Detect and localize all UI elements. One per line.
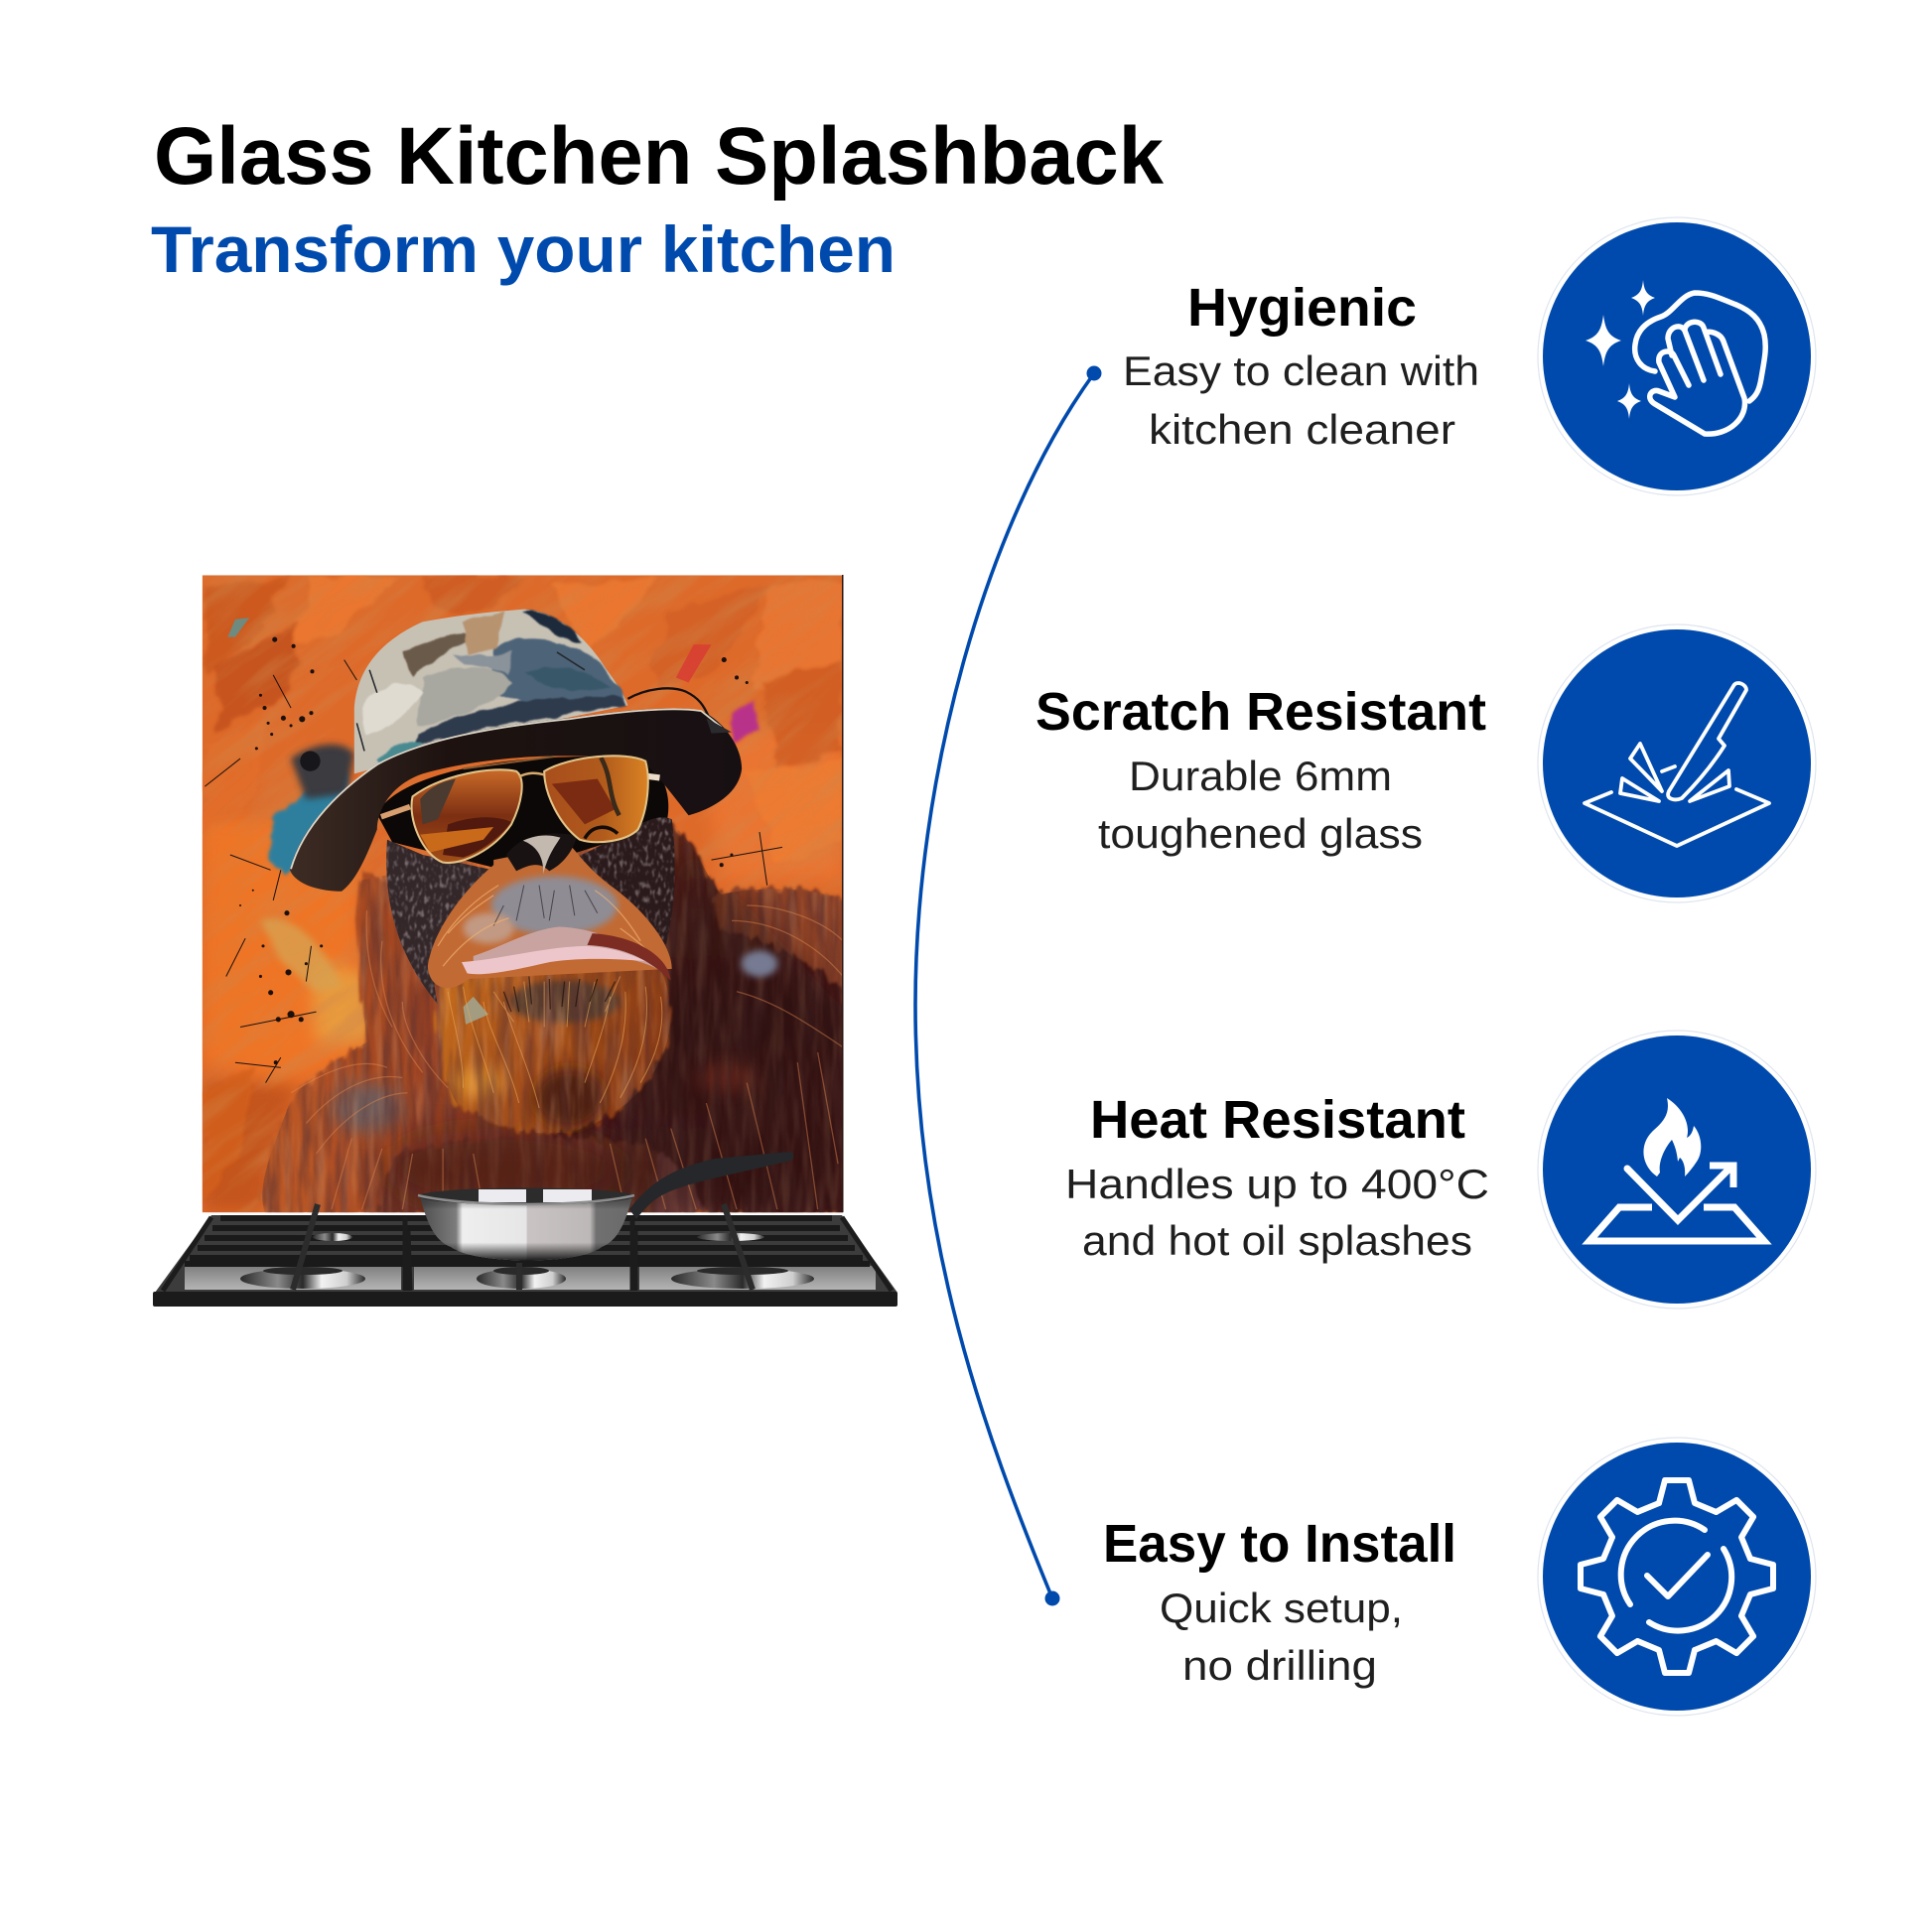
feature: heat resistant: Handles up to 400°C [1065, 1161, 1489, 1207]
burners [240, 1233, 814, 1289]
subtitle: Transform your kitchen [151, 212, 896, 286]
feature: hygienic: Easy to clean with [1123, 347, 1479, 394]
shadow under hat brim [377, 757, 668, 868]
orangutan nose [506, 834, 577, 874]
feature: heat resistant: Heat Resistant [1090, 1090, 1465, 1150]
feature: easy to install: Easy to Install [1103, 1514, 1456, 1574]
feature: scratch resistant: toughened glass [1098, 810, 1423, 857]
top dot [1086, 365, 1102, 381]
feature: scratch resistant: Durable 6mm [1129, 753, 1392, 799]
pan shading [420, 1196, 632, 1261]
grate bars [185, 1218, 870, 1264]
burner trays [185, 1266, 876, 1290]
orangutan fur body [258, 821, 844, 1213]
fur texture [262, 825, 843, 1213]
bucket hat crown [354, 610, 627, 773]
title: Glass Kitchen Splashback [154, 111, 1164, 202]
infographic canvas [151, 125, 1817, 1716]
product image: splashback artwork [203, 575, 844, 1213]
feature: easy to install: Quick setup, [1160, 1585, 1403, 1631]
orangutan dark cheeks [382, 809, 681, 1007]
feature: scratch resistant: Scratch Resistant [1035, 682, 1486, 742]
icon: gear with check [1538, 1438, 1816, 1716]
orangutan muzzle [428, 845, 672, 988]
bottom dot [1044, 1590, 1060, 1606]
feature: easy to install [1103, 1514, 1456, 1689]
orangutan beard [433, 956, 676, 1139]
feature: hygienic: kitchen cleaner [1149, 406, 1455, 453]
front edge [153, 1292, 897, 1307]
hat string [627, 688, 709, 717]
splash panel right edge [842, 575, 844, 1212]
pan rim [418, 1187, 634, 1205]
feature: easy to install: no drilling [1182, 1642, 1377, 1689]
hob top plate [155, 1215, 897, 1293]
feature: hygienic: Hygienic [1187, 278, 1417, 338]
mouth and lips [462, 926, 671, 981]
icon: cleaning hand with sparkles [1538, 217, 1816, 495]
icon: flame over glass [1538, 1031, 1816, 1309]
pot supports [293, 1204, 753, 1290]
connector curve [915, 365, 1102, 1606]
pan bowl [420, 1196, 632, 1261]
paint splashes [205, 618, 782, 1083]
aviator sunglasses [381, 756, 659, 863]
feature: hygienic [1123, 278, 1479, 453]
feature: scratch resistant [1035, 682, 1486, 857]
gas hob [153, 1204, 897, 1307]
frying pan [418, 1152, 793, 1261]
grate frame [163, 1217, 892, 1291]
painted orange background [203, 575, 843, 1213]
hat brim [290, 709, 742, 892]
feature: heat resistant [1065, 1090, 1489, 1264]
pan handle [629, 1152, 793, 1219]
feature: heat resistant: and hot oil splashes [1082, 1217, 1472, 1264]
icon: knife scratching glass [1538, 624, 1816, 902]
